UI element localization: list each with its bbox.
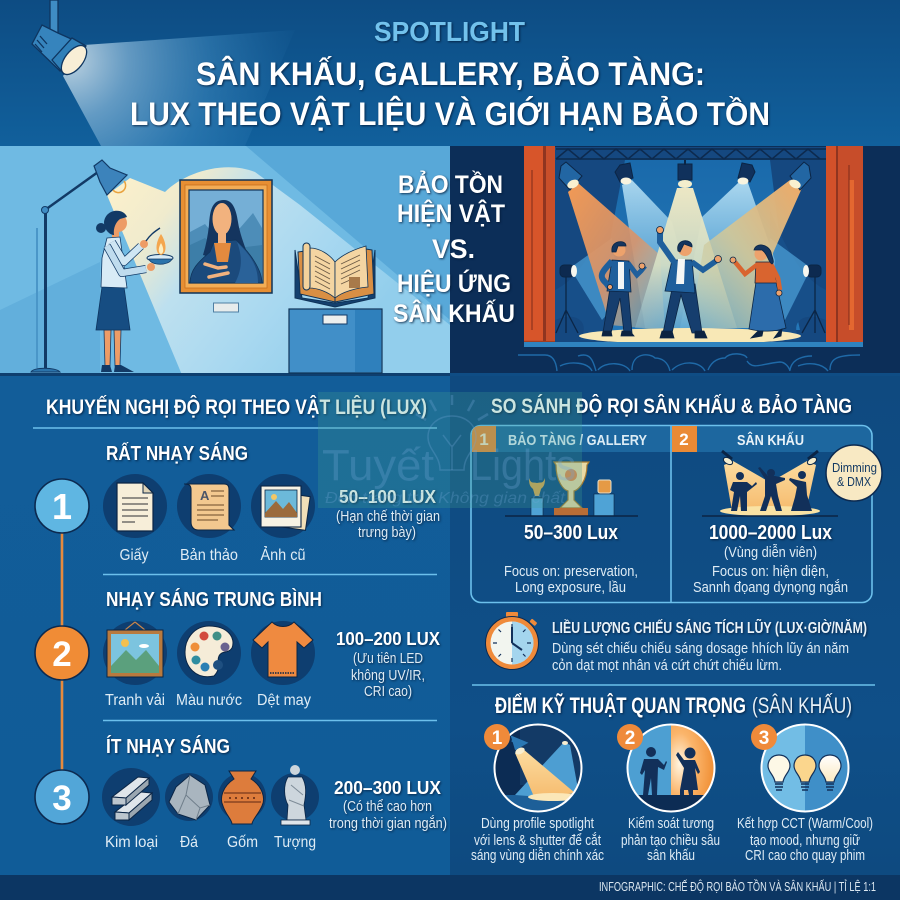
panel centre title: conservation vs stage effect: BẢO TỒN (398, 169, 503, 199)
icon: profile spotlight: 1 (492, 728, 503, 749)
labels: row 1 (120, 545, 306, 564)
timeline connector (61, 530, 63, 772)
panel: material recommendations (33, 395, 447, 851)
column 1 header (472, 426, 647, 452)
watermark: Tuyết Lights (318, 392, 582, 508)
heading: material lux: KHUYẾN NGHỊ ĐỘ RỌI THEO VẬT LIỆU (LUX) (46, 395, 427, 419)
callout: dimming and dmx: & DMX (837, 474, 871, 489)
lux: 200-300: (Có thể cao hơn (343, 798, 432, 815)
caption: Kiểm soát tương (628, 815, 714, 832)
icon: manuscript (177, 474, 241, 538)
lux: 50-100: trưng bày) (358, 524, 416, 541)
caption: với lens & shutter để cắt (474, 832, 602, 849)
performer: man centre (656, 226, 722, 338)
panel centre title: conservation vs stage effect: HIỆN VẬT (397, 198, 505, 228)
panel: stage vs museum comparison (471, 394, 882, 602)
icon: watercolor palette (177, 621, 241, 685)
icon: floor lamp (31, 160, 127, 372)
text block: cumulative dose: Dùng sét chiếu chiếu sáng dosage hhích lũy án năm (552, 640, 849, 657)
audience seats (518, 354, 860, 371)
panel: museum scene (0, 146, 450, 377)
card frame (471, 426, 872, 602)
footer bar (0, 875, 900, 900)
callout: dimming and dmx: Dimming (832, 460, 877, 475)
panel: stage scene (450, 146, 900, 376)
caption (471, 815, 604, 864)
column 2 values: 1000–2000 Lux (709, 522, 832, 544)
lux: 100-200: 100–200 LUX (336, 629, 440, 649)
labels: row 1: Ảnh cũ (260, 545, 306, 564)
technical point 2 (617, 724, 720, 864)
caption: sân khấu (647, 847, 695, 864)
panel centre title: conservation vs stage effect (393, 169, 515, 328)
step 3 badge (35, 770, 89, 824)
icon: statue (271, 765, 319, 825)
lux: 100-200: (Ưu tiên LED (353, 650, 423, 667)
step 1 badge: 1 (52, 486, 72, 527)
labels: row 3: Kim loại (105, 834, 158, 851)
caption: tạo mood, nhưng giữ (750, 832, 860, 849)
performer: woman right (730, 245, 786, 338)
icon: museum artifacts (505, 462, 638, 516)
icon: header spotlight lamp (32, 0, 92, 79)
lux: 100-200: CRI cao) (364, 683, 412, 700)
column 1 values: Focus on: preservation, (504, 563, 638, 580)
labels: row 3: Đá (180, 834, 198, 851)
artwork: open book on plinth (289, 243, 382, 373)
column 2 header: SÂN KHẤU (737, 431, 804, 449)
title block (130, 16, 770, 132)
heading: low sensitive: ÍT NHẠY SÁNG (106, 735, 230, 758)
icon: stage performers (702, 451, 838, 516)
column 2 header (672, 426, 804, 452)
lux: 200-300 (329, 778, 447, 832)
labels: row 3: Tượng (274, 834, 316, 851)
icon: t-shirt (251, 621, 315, 685)
watermark: Tuyết Lights: Lights (470, 441, 576, 490)
stage light beams (568, 180, 811, 344)
text block: cumulative dose (552, 619, 867, 674)
icon: ceramic vase (218, 771, 266, 824)
column 1 values (504, 522, 638, 596)
column 2 values (693, 522, 848, 596)
watermark: Tuyết Lights: Đèn trang trí - Không gian chất (325, 490, 566, 507)
labels: row 3: Gốm (227, 834, 258, 851)
stage lamps (556, 160, 825, 333)
callout: dimming and dmx (826, 445, 882, 501)
caption (621, 815, 720, 864)
labels: row 2 (105, 692, 311, 709)
column 1 values: 50–300 Lux (524, 522, 618, 544)
lux: 200-300: trong thời gian ngắn) (329, 815, 447, 832)
artwork: framed portrait (180, 180, 272, 293)
labels: row 3 (105, 834, 316, 851)
text block: cumulative dose: cỏn dạt mọt nhân vá cứt chứt chiếu lừm. (552, 657, 782, 674)
column 1 values: Long exposure, lầu (515, 579, 626, 596)
technical point 3 (737, 724, 873, 864)
column 1 header: 1 (479, 430, 489, 449)
step 2 badge: 2 (52, 635, 72, 674)
stage floor (524, 342, 863, 347)
column 2 header: 2 (679, 430, 689, 449)
step 3 badge: 3 (52, 779, 72, 818)
caption (737, 815, 873, 864)
title line 1: SÂN KHẤU, GALLERY, BẢO TÀNG: (196, 56, 705, 92)
step 1 badge (35, 479, 89, 533)
labels: row 2: Màu nước (176, 692, 242, 709)
icon: manuscript: A (200, 488, 210, 503)
labels: row 2: Tranh vải (105, 692, 165, 709)
icon: metal bars (102, 768, 160, 826)
heading: very sensitive: RẤT NHẠY SÁNG (106, 442, 248, 465)
panel centre title: conservation vs stage effect: HIỆU ỨNG (397, 268, 511, 298)
lux: 100-200: không UV/IR, (351, 667, 425, 684)
column 2 values: Focus on: hiện diện, (712, 563, 829, 580)
icon: canvas painting (103, 621, 167, 685)
performer: man left (602, 242, 645, 336)
labels: row 2: Dệt may (257, 692, 311, 709)
lux: 50-100 (336, 487, 440, 541)
watermark: Tuyết Lights: Tuyết (322, 441, 434, 490)
lux: 100-200 (336, 629, 440, 700)
heading: key technical points: (SÂN KHẤU) (752, 693, 852, 718)
lux: 50-100: 50–100 LUX (339, 487, 436, 507)
title line 2: LUX THEO VẬT LIỆU VÀ GIỚI HẠN BẢO TỒN (130, 96, 770, 132)
curtains (524, 146, 863, 342)
lower background (0, 376, 900, 875)
header banner (0, 0, 900, 146)
icon: stopwatch (486, 612, 538, 670)
lux: 50-100: (Hạn chế thời gian (336, 508, 440, 525)
icon: stone (165, 773, 213, 821)
panel centre title: conservation vs stage effect: VS. (432, 234, 475, 264)
technical point 1 (471, 724, 604, 864)
icon: paper (103, 474, 167, 538)
icon: old photo (251, 474, 315, 538)
caption: phản tạo chiều sâu (621, 832, 720, 849)
icon: contrast silhouettes: 2 (625, 728, 635, 749)
lux: 200-300: 200–300 LUX (334, 778, 441, 798)
eyebrow: SPOTLIGHT: SPOTLIGHT (374, 16, 525, 47)
truss (556, 149, 826, 159)
labels: row 1: Giấy (120, 547, 148, 564)
panel centre title: conservation vs stage effect: SÂN KHẤU (393, 298, 515, 328)
column 2 values: Sannh đọang dynọng ngắn (693, 579, 848, 596)
caption: CRI cao cho quay phim (745, 847, 865, 864)
labels: row 1: Bản thảo (180, 547, 238, 564)
caption: Dùng profile spotlight (481, 815, 595, 832)
header spotlight beam (63, 30, 295, 146)
column 1 header: BẢO TÀNG / GALLERY (508, 432, 647, 449)
label plate: painting (214, 303, 238, 312)
caption: sáng vùng diễn chính xác (471, 847, 604, 864)
icon: warm and cool bulbs: 3 (759, 728, 769, 749)
heading: medium sensitive: NHẠY SÁNG TRUNG BÌNH (106, 588, 322, 611)
column 2 values: (Vùng diễn viên) (724, 544, 817, 561)
heading: key technical points: ĐIỂM KỸ THUẬT QUAN TRỌNG (495, 693, 746, 718)
step 2 badge (35, 626, 89, 680)
figure: conservator woman (96, 211, 173, 372)
